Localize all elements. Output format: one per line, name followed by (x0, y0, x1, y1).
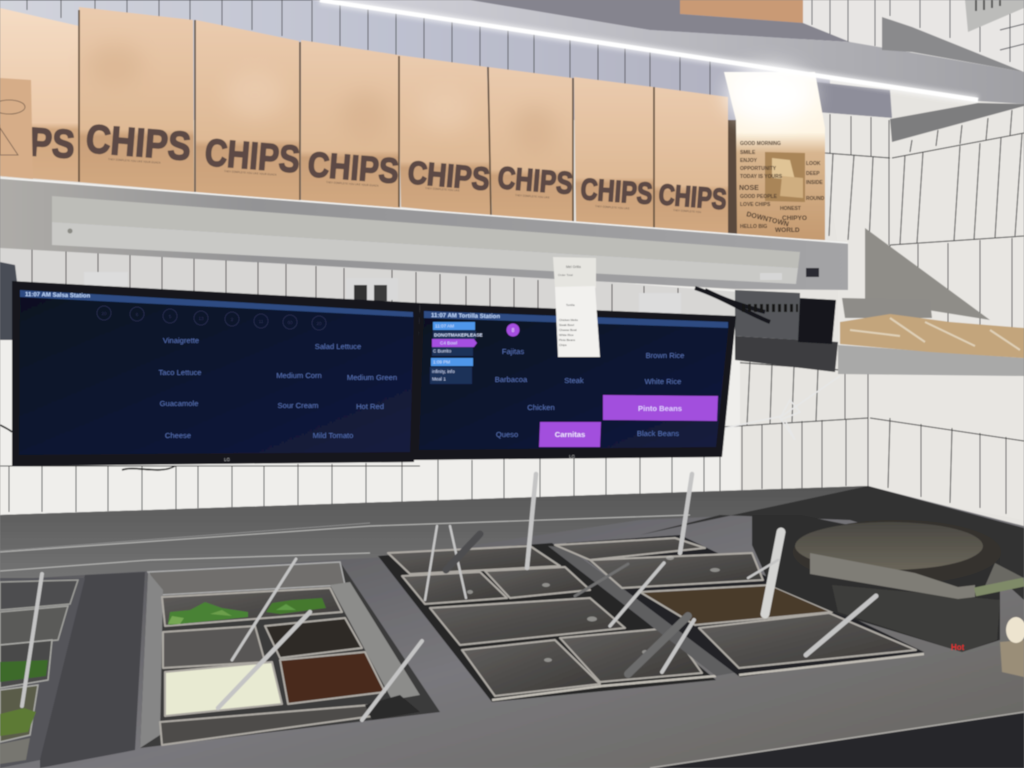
printed chip bag with window: TODAY IS YOURS (740, 174, 783, 180)
selected: pinto beans (603, 395, 718, 421)
header bar (424, 311, 728, 328)
pot rim (793, 520, 1001, 584)
empty pan (163, 626, 265, 668)
order sidebar: DONOTMAKEPLEASE (434, 332, 482, 338)
metal hood (310, 0, 1024, 104)
bag 4: THEY COMPLETE YOU LIKE YOUR GUACA (326, 180, 379, 188)
printed chip bag with window: DOWNTOWN (746, 211, 789, 228)
warmer pot: Hot (951, 643, 965, 652)
pot handle (810, 553, 975, 599)
backsplash (0, 486, 868, 580)
cables behind monitor (0, 425, 175, 470)
bag 2 (78, 7, 194, 192)
printed chip bag with window: CHIPYO (782, 215, 807, 222)
row of CHIPS paper bags (0, 7, 728, 236)
printed chip bag with window: SMILE (740, 150, 756, 156)
strip of counter between the hot wells (548, 546, 738, 676)
taped receipts: Cheese Bowl (559, 328, 577, 332)
bag 6: CHIPS (496, 160, 574, 201)
bag 8 (653, 87, 728, 236)
bag 4: CHIPS (306, 145, 400, 191)
ingredient labels: Medium Green (347, 373, 397, 382)
brown box on the hood (680, 0, 803, 23)
taped receipts (553, 257, 600, 357)
bag 5 (398, 55, 491, 216)
serving utensils (22, 474, 876, 720)
taped receipts: Order Total (558, 273, 573, 277)
left small well (0, 578, 85, 768)
warmer pot (752, 515, 1024, 652)
counter centre shading (40, 572, 145, 768)
ingredient labels: Chicken (527, 403, 555, 412)
taped receipts: Mel Grilla (566, 265, 581, 269)
order count circles: 11 (259, 319, 264, 324)
hood underside (890, 103, 1024, 142)
bag 7: CHIPS (580, 173, 654, 211)
sour cream pan (165, 662, 282, 716)
taped receipts: Steak Bowl (559, 323, 574, 327)
middle hot well (378, 543, 716, 702)
greens (0, 660, 48, 682)
bag 8: THEY COMPLETE YOU (673, 208, 701, 214)
order count circles (97, 306, 326, 330)
stacked cups (1000, 617, 1024, 677)
wall between shelf and counter (0, 245, 868, 515)
green grip (975, 582, 1024, 592)
right hot well (555, 535, 924, 677)
printed chip bag with window: ROUND (806, 196, 825, 202)
ingredient labels: Taco Lettuce (158, 368, 202, 377)
order sidebar: 11:07 AM (435, 324, 454, 328)
ingredient labels: Mild Tomato (313, 431, 353, 440)
ingredient labels: Brown Rice (646, 351, 684, 360)
pot rim right (985, 563, 1024, 586)
monitor: salsa station: 11:07 AM Salsa Station (25, 292, 91, 300)
selected: carnitas (539, 422, 601, 447)
wall vent (965, 0, 1024, 32)
bag 7: THEY COMPLETE YOU LIKE (595, 204, 630, 210)
printed chip bag with window: HELLO BIG (740, 224, 767, 230)
printed chip bag with window: NOSE (739, 185, 759, 192)
bag 6 (488, 67, 574, 222)
bag 3: CHIPS (203, 132, 301, 181)
order sidebar (430, 322, 482, 384)
printed chip bag with window: HONEST (780, 206, 801, 212)
order count circles: 13 (198, 316, 204, 321)
ingredient labels: Cheese (165, 431, 191, 440)
ingredient labels: Pinto Beans (638, 404, 682, 413)
ingredient labels: Salad Lettuce (315, 342, 361, 351)
dark salsa pan (265, 618, 362, 658)
right back corner (640, 486, 1024, 600)
lettuce pan (162, 588, 342, 626)
printed chip bag with window: WORLD (775, 227, 800, 234)
order sidebar: 1:09 PM (433, 360, 450, 364)
front pan (160, 705, 395, 745)
bag 2: CHIPS (84, 117, 192, 169)
active order circle (506, 324, 520, 336)
monitor: salsa station (12, 281, 420, 466)
bag 1 (0, 8, 79, 182)
ingredient labels: Hot Red (356, 402, 384, 411)
glowing light strip (320, 0, 978, 123)
right wall tile panel (730, 105, 1024, 530)
bag 3: THEY COMPLETE YOU LIKE YOUR GUACA (224, 169, 277, 177)
bag 8: CHIPS (657, 179, 728, 216)
pot lid (795, 522, 983, 570)
ingredient labels: Sour Cream (278, 401, 318, 410)
printed chip bag with window: GOOD PEOPLE (740, 194, 778, 200)
order sidebar: infinity, info (432, 369, 455, 374)
ingredient labels: Vinaigrette (163, 336, 199, 345)
printed chip bag with window: DEEP (806, 171, 820, 177)
ingredient labels: Barbacoa (495, 375, 528, 384)
printed chip bag with window (724, 72, 825, 240)
lettuce (168, 598, 326, 625)
left wall box (0, 262, 18, 340)
order count circles: 20 (101, 311, 107, 316)
order count circles: 20 (316, 321, 322, 326)
wall outlets (84, 272, 681, 316)
ingredient labels: White Rice (645, 377, 681, 386)
small bag in front (0, 78, 33, 179)
monitor: salsa station: LG (224, 457, 231, 462)
ingredient labels (158, 336, 397, 440)
salsa well (140, 562, 440, 748)
pan highlights (666, 556, 720, 572)
order sidebar: Meal 1 (432, 376, 446, 382)
printed chip bag with window: OPPORTUNITY (740, 166, 777, 172)
ingredient labels: Carnitas (555, 430, 585, 439)
ingredient labels: Queso (496, 430, 518, 439)
taped receipts: Pinto Beans (559, 338, 576, 342)
order count circles: 2 (231, 317, 234, 322)
ingredient labels: Fajitas (502, 347, 524, 356)
red salsa pan (280, 652, 385, 704)
bag 2: THEY COMPLETE YOU LIKE YOUR GUACA (108, 157, 161, 165)
pot body (832, 585, 1000, 652)
active order circle: 8 (512, 328, 515, 334)
ingredient labels: Black Beans (637, 429, 679, 438)
taped receipts: Chips (559, 343, 567, 347)
upper right white tiles (803, 0, 1024, 75)
bag 6: THEY COMPLETE YOU LIKE (515, 193, 550, 199)
bag 3 (196, 20, 301, 201)
cable box and wires (695, 288, 840, 440)
printed chip bag with window: INSIDE (806, 180, 823, 186)
taped receipts: White Rice (559, 333, 574, 337)
lit bracket and side shelf (838, 228, 1024, 376)
ingredient labels: Steak (564, 376, 584, 385)
ingredient labels: Guacamole (160, 399, 198, 408)
steel shelf (0, 178, 848, 290)
bag 5: CHIPS (406, 154, 491, 197)
taped receipts: Chicken Melts (559, 318, 578, 322)
wrapped tortillas on side shelf (840, 314, 1024, 358)
front edge (650, 712, 1024, 768)
order sidebar: C4 Bowl (440, 340, 457, 346)
bag 7 (574, 77, 655, 229)
white cable (725, 376, 840, 440)
order count circles: 60 (287, 320, 293, 325)
order sidebar: C Burrito (433, 348, 452, 354)
printed chip bag with window: GOOD MORNING (740, 141, 781, 147)
order count circles: 6 (136, 312, 139, 317)
monitor: tortilla station: 11:07 AM Tortilla Station (431, 313, 500, 320)
bag 4 (301, 40, 400, 208)
monitor: tortilla station: LG (569, 454, 576, 459)
shadowed tiles under the hood (816, 82, 892, 118)
ingredient labels (495, 347, 684, 439)
pan highlights (467, 583, 648, 662)
printed chip bag with window: ENJOY (740, 158, 758, 164)
monitor: tortilla station (413, 303, 736, 460)
steel counter (0, 486, 1024, 768)
printed chip bag with window: LOOK (806, 161, 821, 167)
header bar (20, 290, 413, 317)
ingredient labels: Medium Corn (276, 371, 322, 380)
taped receipts: Tortilla (566, 303, 575, 307)
printed chip bag with window: LOVE CHIPS (740, 202, 771, 208)
order count circles: 5 (169, 314, 172, 319)
bag 5: THEY COMPLETE YOU LIKE (425, 186, 460, 192)
shelf rail (52, 196, 800, 268)
